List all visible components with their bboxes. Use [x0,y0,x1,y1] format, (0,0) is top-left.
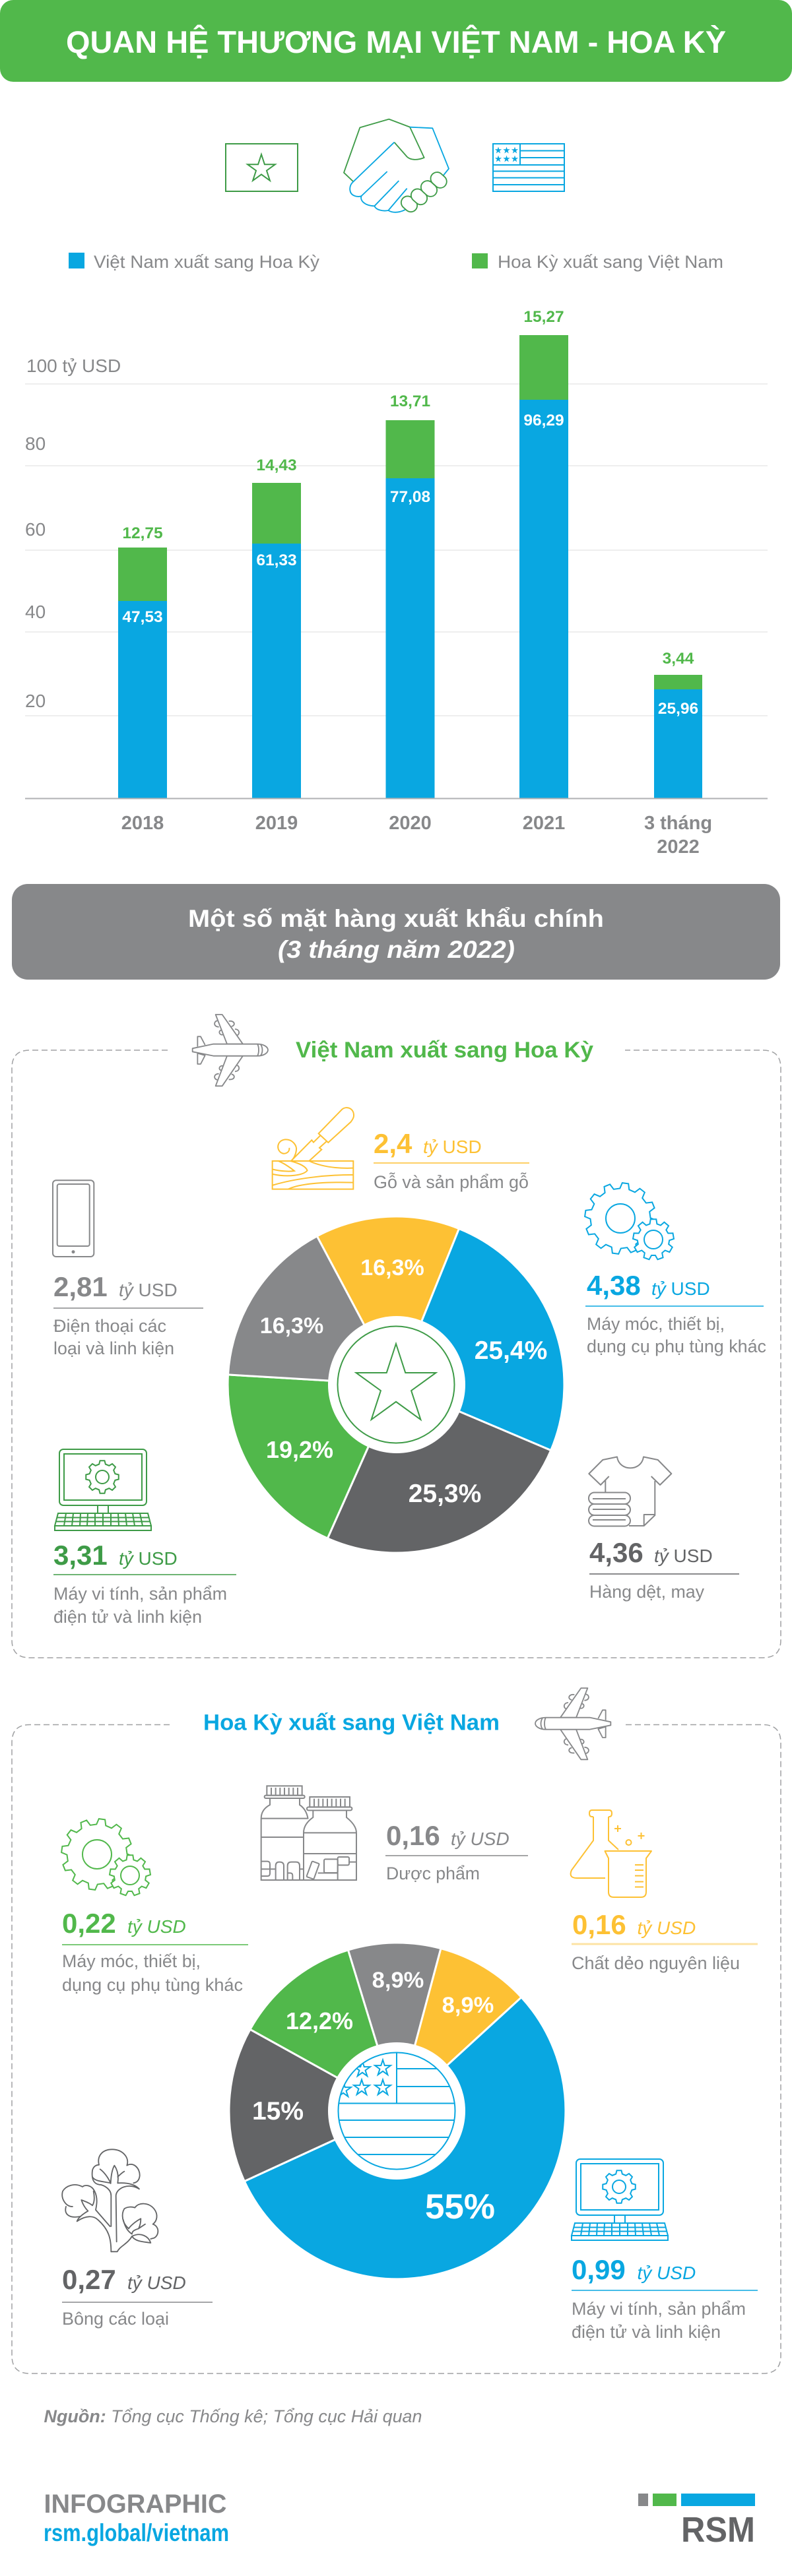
bar 2019 [252,456,301,834]
footer: infographic label [44,2490,229,2546]
callout: plastics: tỷ USD [638,1918,696,1938]
bar 2019: 2019 [255,813,298,834]
donut chart: US exports: 55% [425,2187,495,2226]
callout: computers: Máy vi tính, sản phẩm [53,1584,227,1604]
bar 2021: 2021 [523,813,565,834]
icon: t-shirt and folded clothes [589,1457,671,1526]
callout: machinery: dụng cụ phụ tùng khác [62,1975,243,1995]
callout: cotton: tỷ USD [127,2273,186,2293]
callout: textiles: 4,36 [589,1537,644,1568]
y axis labels: 60 [25,519,46,540]
callout: phones: tỷ USD [119,1280,178,1300]
callout: phones [53,1271,203,1358]
section banner: Một số mặt hàng xuất khẩu chính [188,905,604,932]
icon: flask and beaker [571,1810,651,1897]
y axis labels: 80 [25,433,46,454]
callout: machinery [62,1908,248,1995]
callout: wood products: Gỗ và sản phẩm gỗ [374,1172,529,1192]
donut chart: Vietnam exports: 25,3% [409,1480,481,1508]
bar 2021 [519,308,568,834]
bar 2021: 96,29 [523,412,564,429]
stacked bar chart [25,308,768,858]
callout: textiles [589,1537,739,1602]
donut chart: US exports: 15% [252,2097,304,2125]
icon: wood and chisel [273,1108,354,1189]
source note: Nguồn: Tổng cục Thống kê; Tổng cục Hải quan [44,2406,422,2426]
icon: Vietnam flag [226,144,298,191]
icon: computer [55,1449,151,1530]
callout: machinery: 0,22 [62,1908,116,1939]
callout: wood products [374,1128,529,1192]
bar 2020: 77,08 [390,488,430,506]
callout: pharmaceuticals: Dược phẩm [386,1864,480,1883]
bar 2020 [385,393,434,834]
icon: US flag [493,144,564,191]
callout: computers: 0,99 [572,2254,626,2285]
section banner: (3 tháng năm 2022) [278,936,515,963]
callout: wood products: tỷ USD [423,1137,482,1157]
donut chart: Vietnam exports: 16,3% [260,1313,323,1338]
callout: computers: điện tử và linh kiện [572,2322,721,2342]
callout: machinery: tỷ USD [651,1278,710,1299]
bar 3 months 2022: 3,44 [663,650,694,668]
y axis labels [25,356,121,711]
icon: smartphone [53,1180,94,1257]
icon: handshake [344,119,449,214]
callout: computers: điện tử và linh kiện [53,1607,202,1627]
callout: phones: 2,81 [53,1271,108,1302]
RSM logo [638,2494,755,2550]
callout: plastics: Chất dẻo nguyên liệu [572,1953,740,1973]
callout: machinery [585,1270,766,1356]
callout: computers: tỷ USD [638,2263,696,2283]
bar 2020: 13,71 [390,393,430,410]
bar 2018: 2018 [121,813,164,834]
y axis labels: 20 [25,691,46,711]
callout: machinery: Máy móc, thiết bị, [587,1314,725,1334]
callout: textiles: tỷ USD [654,1546,713,1566]
callout: machinery: tỷ USD [127,1916,186,1937]
y axis labels: 40 [25,602,46,622]
callout: machinery: Máy móc, thiết bị, [62,1951,201,1971]
callout: computers [53,1540,236,1627]
callout: wood products: 2,4 [374,1128,412,1159]
panel: US exports to Vietnam [12,1688,781,2373]
footer: infographic label: INFOGRAPHIC [44,2490,227,2519]
RSM logo: RSM [681,2510,755,2550]
callout: computers [572,2254,758,2342]
callout: machinery: dụng cụ phụ tùng khác [587,1336,766,1356]
donut chart: Vietnam exports: 25,4% [475,1336,547,1365]
callout: plastics [572,1909,758,1973]
bar 2019: 14,43 [256,456,297,474]
callout: pharmaceuticals: 0,16 [386,1820,440,1851]
section banner [12,884,780,980]
bar 2018 [118,524,167,834]
callout: cotton: Bông các loại [62,2309,169,2329]
callout: cotton [62,2264,213,2329]
callout: textiles: Hàng dệt, may [589,1582,704,1602]
callout: pharmaceuticals [385,1820,528,1883]
legend: Việt Nam xuất sang Hoa Kỳ [94,252,320,272]
callout: phones: Điện thoại các [53,1316,166,1336]
callout: pharmaceuticals: tỷ USD [451,1829,510,1849]
icon: gears [57,1814,150,1895]
bar 2018: 47,53 [122,608,163,626]
icon: airplane [535,1688,610,1759]
bar 3 months 2022 [644,650,712,858]
bar 2019: 61,33 [256,551,297,569]
callout: computers: Máy vi tính, sản phẩm [572,2299,746,2319]
legend: Hoa Kỳ xuất sang Việt Nam [498,252,723,272]
donut chart: US exports [229,1943,566,2279]
icon: medicine bottles [261,1786,356,1880]
title banner [0,0,792,82]
callout: cotton: 0,27 [62,2264,116,2295]
bar 2020: 2020 [389,813,432,834]
donut chart: US exports: 8,9% [372,1968,424,1993]
callout: computers: tỷ USD [119,1548,178,1569]
donut chart: Vietnam exports [228,1216,564,1553]
bar 2021: 15,27 [523,308,564,326]
y axis labels: 100 tỷ USD [26,356,121,376]
icon: airplane [193,1015,268,1086]
callout: computers: 3,31 [53,1540,108,1571]
donut chart: Vietnam exports: 16,3% [360,1255,424,1280]
icon: cotton plant [62,2149,158,2251]
legend [69,252,723,272]
flag inside donut [339,2053,454,2155]
bar 3 months 2022: 25,96 [658,700,698,718]
bar 2018: 12,75 [122,524,163,542]
panel heading: Hoa Kỳ xuất sang Việt Nam [203,1710,500,1735]
title banner: QUAN HỆ THƯƠNG MẠI VIỆT NAM - HOA KỲ [66,24,726,59]
panel: Vietnam exports to US [12,1015,781,1658]
donut chart: Vietnam exports: 19,2% [266,1436,333,1463]
callout: machinery: 4,38 [587,1270,641,1301]
panel heading: Việt Nam xuất sang Hoa Kỳ [296,1038,593,1063]
donut chart: US exports: 12,2% [286,2007,353,2034]
icon: computer [572,2159,668,2240]
icon: gears [580,1178,674,1259]
callout: phones: loại và linh kiện [53,1338,174,1358]
callout: plastics: 0,16 [572,1909,626,1940]
footer: infographic label: rsm.global/vietnam [44,2519,229,2546]
donut chart: US exports: 8,9% [442,1993,494,2018]
bar 3 months 2022: 3 tháng [644,813,712,834]
bar 3 months 2022: 2022 [657,836,700,858]
